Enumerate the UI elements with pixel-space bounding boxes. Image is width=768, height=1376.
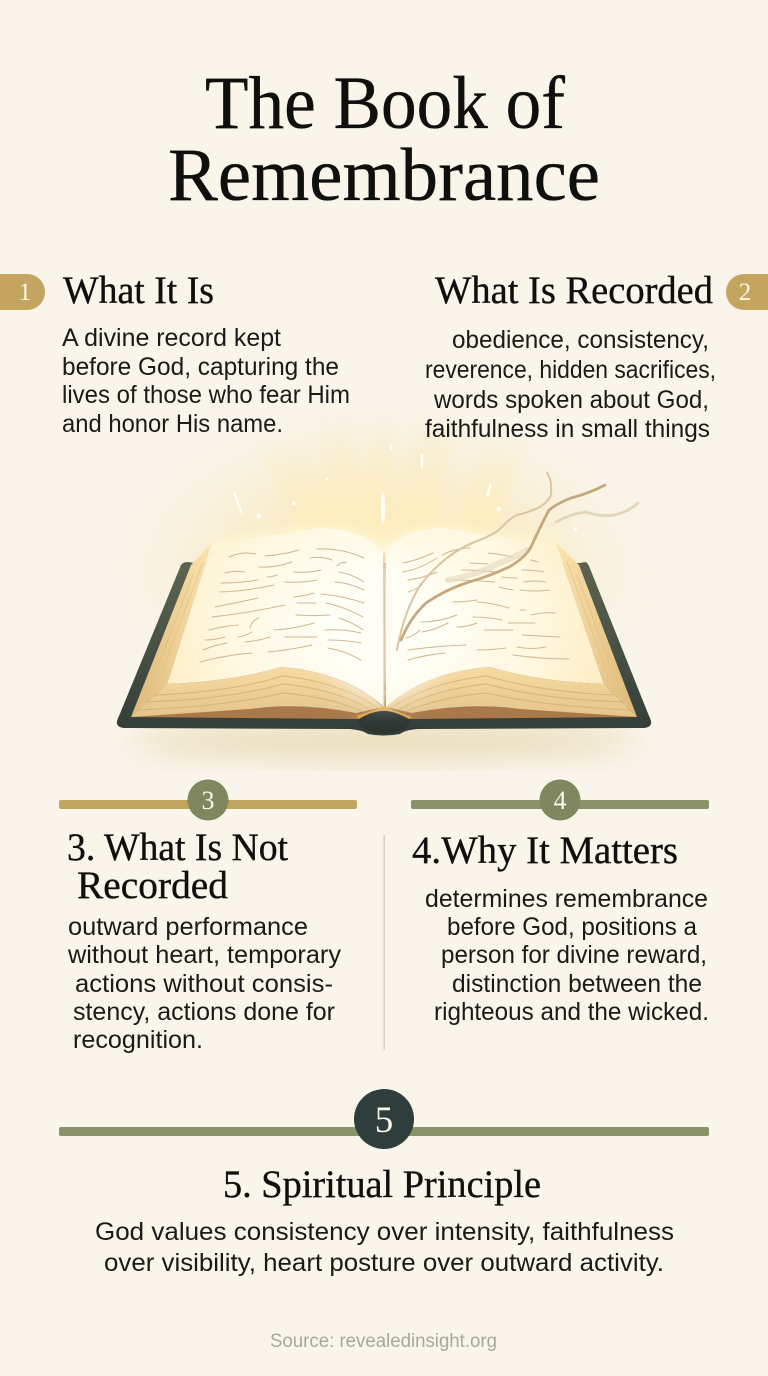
text: what is recorded: reverence, hidden sacrifices,	[425, 356, 716, 384]
text: what it is: A divine record kept	[62, 324, 281, 352]
heading: what is not recorded: 3. What Is Not	[67, 826, 288, 869]
heading: what is not recorded: Recorded	[77, 864, 228, 907]
gold spine ribbon	[356, 706, 412, 719]
panel: why it matters	[411, 780, 709, 1026]
heading: spiritual principle: 5. Spiritual Principle	[223, 1163, 541, 1206]
sparkles	[233, 444, 577, 531]
badge 1	[0, 274, 45, 310]
badge 1: 1	[19, 279, 31, 306]
bar and badge 5: 5	[375, 1100, 393, 1141]
text: what is not recorded: without heart, temporary	[67, 941, 341, 969]
text: spiritual principle: God values consistency over intensity, faithfulness	[95, 1218, 674, 1246]
left page	[167, 528, 384, 707]
text: why it matters: distinction between the	[452, 970, 702, 998]
light rays	[250, 405, 535, 530]
text: what it is: and honor His name.	[62, 410, 283, 438]
text: why it matters: righteous and the wicked.	[434, 998, 709, 1026]
bar and badge 5	[59, 1089, 709, 1149]
text: what is not recorded: actions without consis-	[75, 970, 333, 998]
panel: what is recorded	[425, 269, 768, 443]
bar and badge 4	[411, 780, 709, 820]
title	[168, 62, 600, 217]
heading: what is recorded: What Is Recorded	[435, 269, 713, 312]
page top glow	[212, 528, 556, 553]
text: why it matters: person for divine reward,	[441, 941, 707, 969]
text: what it is: lives of those who fear Him	[62, 381, 350, 409]
badge 2	[726, 274, 768, 310]
right page handwriting	[403, 548, 569, 660]
page stacks	[131, 667, 637, 717]
text: what is not recorded: outward performance	[68, 913, 308, 941]
source line: Source: revealedinsight.org	[270, 1331, 497, 1352]
brown underside	[131, 690, 637, 719]
text: spiritual principle: over visibility, heart posture over outward activity.	[104, 1249, 664, 1277]
text: what it is	[62, 324, 350, 438]
panel: what it is	[0, 269, 350, 438]
inner glow	[324, 550, 444, 700]
book cover	[117, 562, 651, 736]
text: what is recorded: words spoken about God,	[433, 386, 709, 414]
heading: what it is: What It Is	[63, 269, 214, 312]
dark spine	[358, 711, 410, 734]
text: what is not recorded: recognition.	[73, 1026, 203, 1054]
bar and badge 3	[59, 780, 357, 820]
text: what is not recorded	[67, 913, 341, 1054]
text: why it matters: determines remembrance	[425, 885, 708, 913]
left page handwriting	[200, 549, 364, 662]
text: spiritual principle	[95, 1218, 674, 1277]
panel: spiritual principle	[59, 1089, 709, 1277]
floor shadow	[129, 726, 639, 758]
rising ink wisps	[397, 473, 638, 650]
heading: why it matters: 4.Why It Matters	[412, 829, 678, 872]
centre gutter	[383, 553, 385, 706]
title: Remembrance	[168, 134, 600, 217]
text: what is recorded: obedience, consistency,	[452, 326, 709, 354]
page fore-edges	[131, 543, 637, 717]
text: what it is: before God, capturing the	[62, 353, 339, 381]
title: The Book of	[205, 62, 565, 145]
glow behind book	[99, 400, 669, 740]
bar and badge 4: 4	[554, 786, 566, 815]
text: why it matters: before God, positions a	[447, 913, 697, 941]
illustration: glowing open book	[99, 400, 669, 758]
right page	[386, 528, 604, 707]
text: what is recorded: faithfulness in small things	[425, 415, 710, 443]
heading: what is not recorded	[67, 826, 288, 907]
panel: what is not recorded	[59, 780, 357, 1054]
badge 2: 2	[739, 279, 751, 306]
text: why it matters	[425, 885, 709, 1026]
text: what is not recorded: stency, actions done for	[73, 998, 335, 1026]
bar and badge 3: 3	[202, 786, 214, 815]
text: what is recorded	[425, 326, 716, 443]
